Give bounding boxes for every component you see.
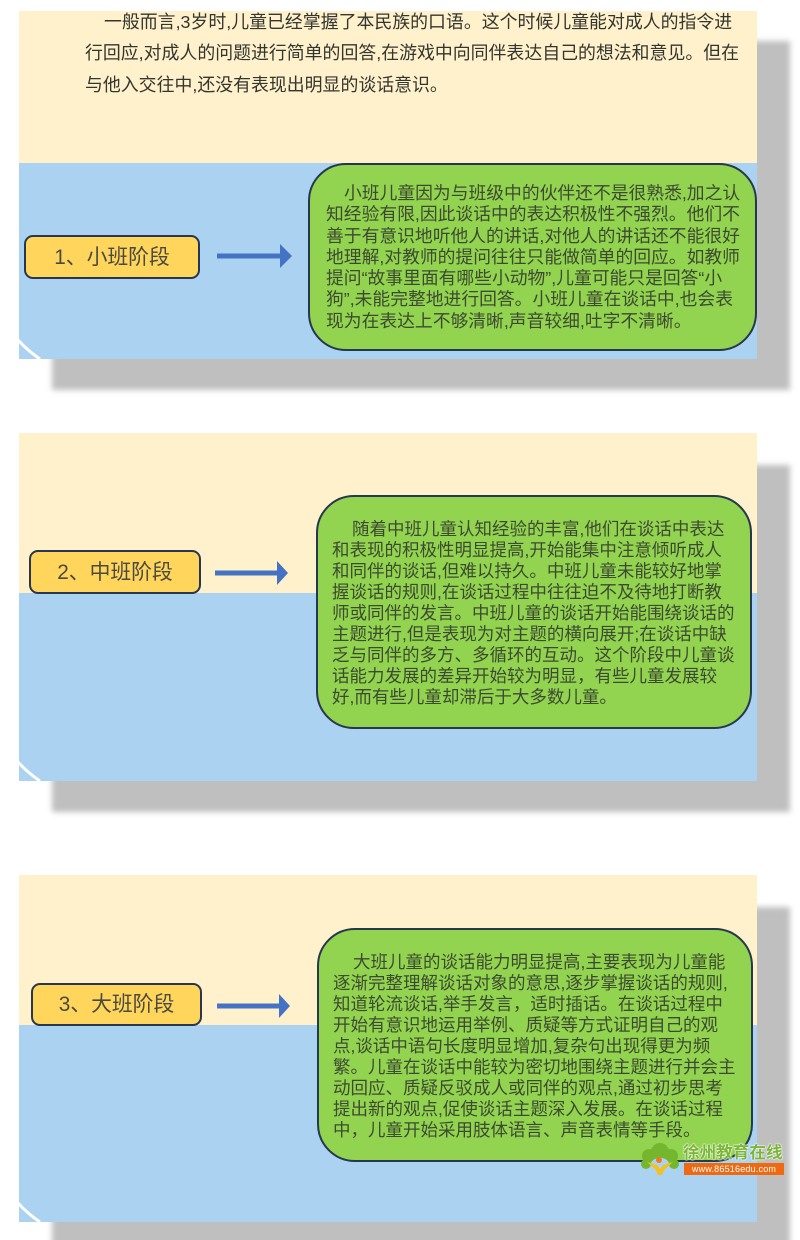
label: stage 3 senior class: 3、大班阶段 xyxy=(59,993,174,1016)
bubble: stage 2 description: 随着中班儿童认知经验的丰富,他们在谈话中表达 xyxy=(352,519,724,539)
bubble: stage 1 description xyxy=(308,163,757,351)
panel shadow: stage 1 xyxy=(52,41,790,390)
arrow: stage 3 xyxy=(217,994,290,1018)
bubble: stage 2 description: 和同伴的谈话,但难以持久。中班儿童未能较好地掌 xyxy=(332,561,722,581)
bubble: stage 2 description: 握谈话的规则,在谈话过程中往往迫不及待地打断教 xyxy=(332,582,722,602)
arrow: stage 1 xyxy=(217,244,292,268)
bubble: stage 3 description: 开始有意识地运用举例、质疑等方式证明自己的观 xyxy=(333,1015,718,1035)
text block: introduction xyxy=(85,12,739,95)
text block: introduction: 与他入交往中,还没有表现出明显的谈话意识。 xyxy=(85,75,448,95)
bubble: stage 3 description: 逐渐完整理解谈话对象的意思,逐步掌握谈话的规则, xyxy=(333,973,728,993)
bubble: stage 2 description: 好,而有些儿童却滞后于大多数儿童。 xyxy=(332,687,617,707)
bubble: stage 3 description: 中，儿童开始采用肢体语言、声音表情等手段。 xyxy=(333,1120,700,1140)
bubble: stage 2 description: 话能力发展的差异开始较为明显，有些儿童发展较 xyxy=(332,666,717,686)
bubble: stage 1 description: 狗”,未能完整地进行回答。小班儿童在谈话中,也会表 xyxy=(326,289,733,309)
bubble: stage 2 description: 主题进行,但是表现为对主题的横向展开;在谈话中缺 xyxy=(332,624,727,644)
bubble: stage 3 description: 动回应、质疑反驳成人或同伴的观点,通过初步思考 xyxy=(333,1078,723,1098)
text block: introduction: 行回应,对成人的问题进行简单的回答,在游戏中向同伴表达自己的想法和意见。但在 xyxy=(85,43,739,63)
bubble: stage 1 description: 知经验有限,因此谈话中的表达积极性不强烈。他们不 xyxy=(326,204,740,224)
bubble: stage 3 description: 点,谈话中语句长度明显增加,复杂句出现得更为频 xyxy=(333,1036,710,1056)
bubble: stage 3 description: 大班儿童的谈话能力明显提高,主要表现为儿童能 xyxy=(353,952,725,972)
logo url: www.86516edu.com xyxy=(692,1164,776,1174)
bubble: stage 3 description: 知道轮流谈话,举手发言，适时插话。在谈话过程中 xyxy=(333,994,723,1014)
bubble: stage 1 description: 现为在表达上不够清晰,声音较细,吐字不清晰。 xyxy=(326,311,692,331)
label: stage 1 small class xyxy=(24,235,200,279)
bubble: stage 2 description xyxy=(316,495,752,729)
bubble: stage 1 description: 提问“故事里面有哪些小动物”,儿童可能只是回答“小 xyxy=(326,268,722,288)
label: stage 2 middle class: 2、中班阶段 xyxy=(57,561,173,584)
logo name: 徐州教育在线 xyxy=(683,1143,783,1162)
bubble: stage 2 description: 师或同伴的发言。中班儿童的谈话开始能围绕谈话的 xyxy=(332,603,734,623)
label: stage 3 senior class xyxy=(31,983,202,1026)
bubble: stage 1 description: 小班儿童因为与班级中的伙伴还不是很熟悉,加之认 xyxy=(344,183,740,203)
watermark logo xyxy=(641,1142,784,1175)
label: stage 2 middle class xyxy=(29,550,201,594)
panel shadow: stage 3 xyxy=(52,907,790,1240)
bubble: stage 3 description: 繁。儿童在谈话中能较为密切地围绕主题进行并会主 xyxy=(333,1057,736,1077)
bubble: stage 1 description: 地理解,对教师的提问往往只能做简单的回应。如教师 xyxy=(326,247,740,267)
bubble: stage 3 description xyxy=(317,928,753,1162)
text block: introduction: 一般而言,3岁时,儿童已经掌握了本民族的口语。这个时候儿童能对成人的指令进 xyxy=(104,12,732,32)
bubble: stage 2 description: 乏与同伴的多方、多循环的互动。这个阶段中儿童谈 xyxy=(332,645,734,665)
label: stage 1 small class: 1、小班阶段 xyxy=(54,246,170,269)
icon: tree logo xyxy=(641,1143,679,1175)
bubble: stage 1 description: 善于有意识地听他人的讲话,对他人的讲话还不能很好 xyxy=(326,226,740,246)
panel shadow: stage 2 xyxy=(52,465,790,812)
panel: stage 1 background xyxy=(19,11,757,359)
bubble: stage 2 description: 和表现的积极性明显提高,开始能集中注意倾听成人 xyxy=(332,540,722,560)
arrow: stage 2 xyxy=(215,561,288,585)
bubble: stage 3 description: 提出新的观点,促使谈话主题深入发展。在谈话过程 xyxy=(333,1099,723,1119)
panel: stage 2 background xyxy=(19,433,757,781)
panel: stage 3 background xyxy=(19,875,757,1222)
